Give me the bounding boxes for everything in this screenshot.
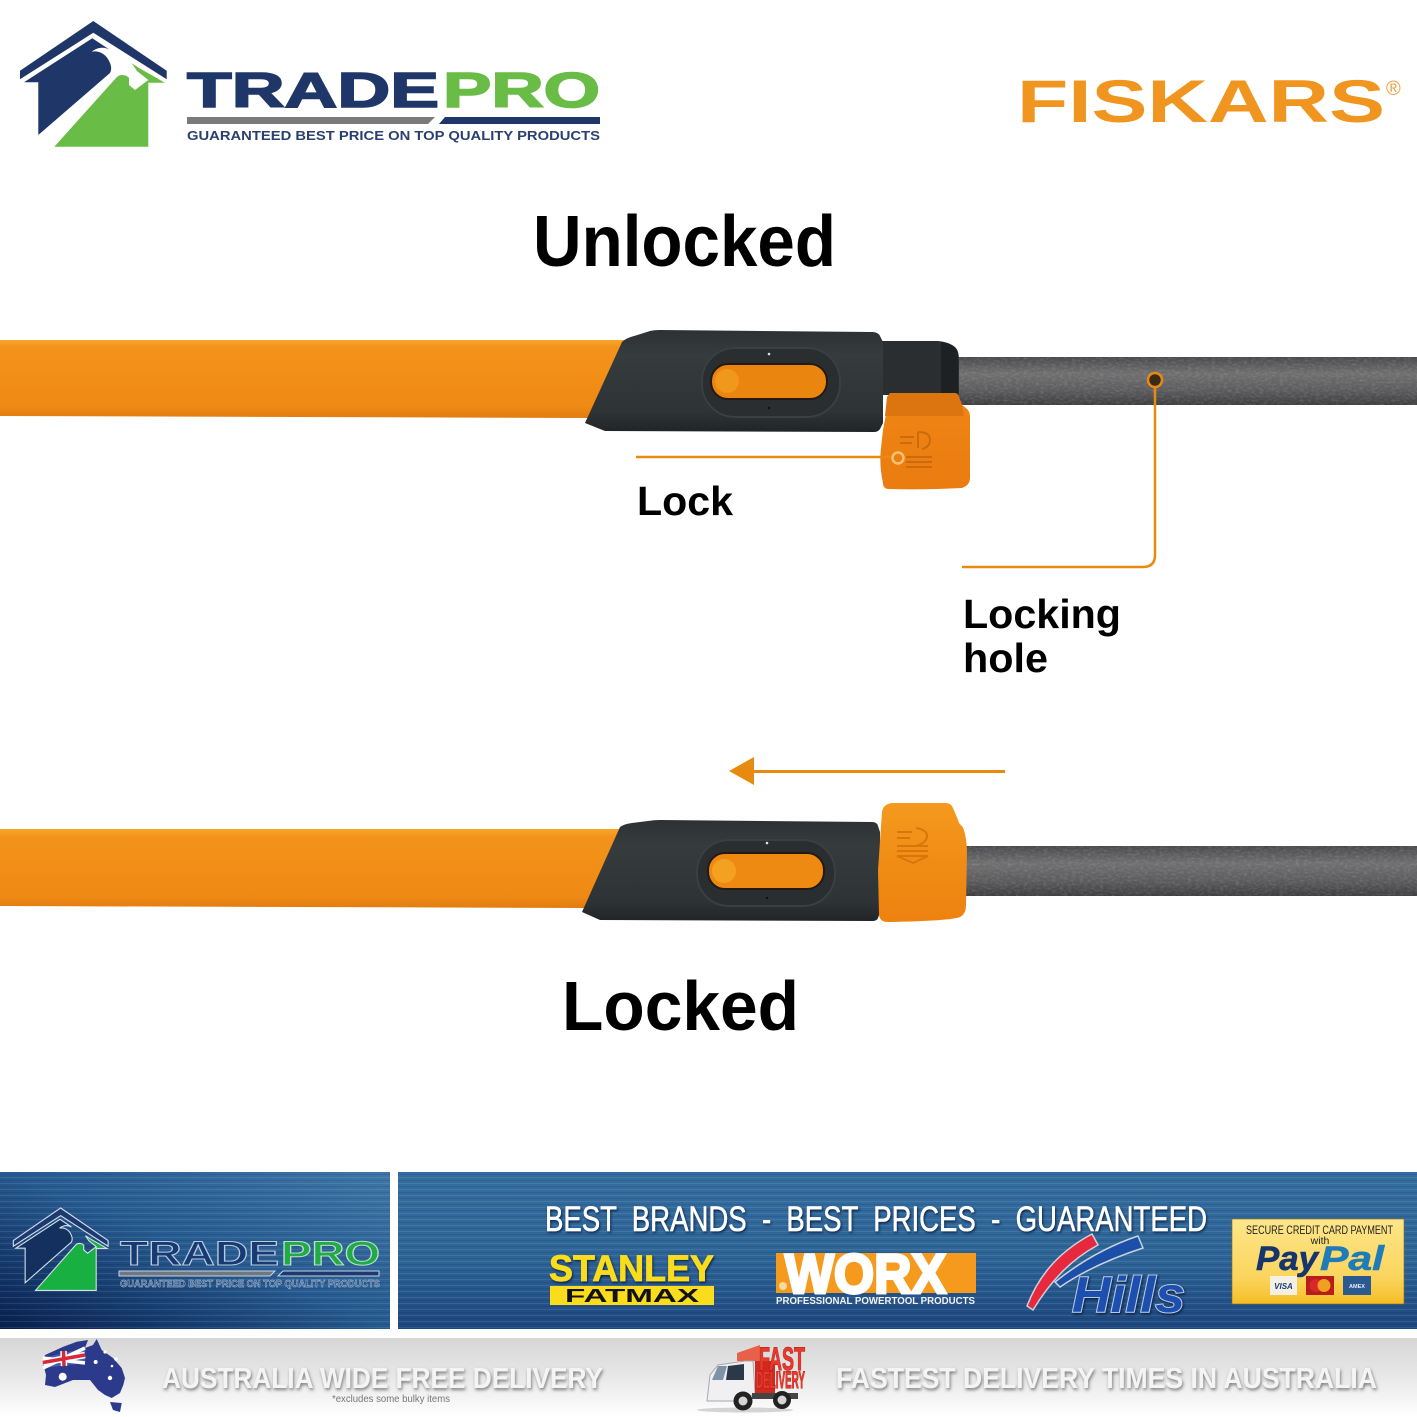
- PayPal secure payment badge: [1232, 1219, 1404, 1304]
- panel: TradePro blue banner: [0, 1172, 390, 1329]
- grey telescopic rod: [955, 357, 1417, 405]
- brand name TRADE: TRADE: [187, 64, 439, 118]
- orange slider button: [708, 853, 824, 889]
- button housing: [697, 840, 835, 906]
- PayPal secure payment badge: with: [1310, 1235, 1329, 1247]
- PayPal secure payment badge: Pay: [1256, 1240, 1320, 1278]
- locking hole: [1148, 373, 1162, 387]
- banner tagline: GUARANTEED BEST PRICE ON TOP QUALITY PRODUCTS: [120, 1278, 380, 1290]
- grey telescopic rod: [960, 846, 1417, 896]
- icon: house with hammer: [20, 21, 167, 147]
- logo: Worx: WORX: [785, 1242, 946, 1305]
- navy divider bar: [439, 117, 600, 124]
- banner brand TRADE: TRADE: [120, 1235, 279, 1273]
- icon: fast delivery truck: [697, 1341, 805, 1412]
- orange slider button: [711, 364, 827, 399]
- grey divider bar: [187, 117, 435, 124]
- dark grip: [582, 820, 880, 921]
- banner divider bars: [119, 1271, 379, 1276]
- label: Locking hole: Locking: [963, 591, 1121, 637]
- registered mark: ®: [1386, 78, 1401, 100]
- heading: Locked: Locked: [562, 967, 799, 1045]
- tagline: GUARANTEED BEST PRICE ON TOP QUALITY PRODUCTS: [187, 128, 600, 143]
- label: Lock: Lock: [637, 478, 733, 524]
- dark collar shade: [941, 342, 958, 393]
- PayPal secure payment badge: Pal: [1320, 1240, 1386, 1278]
- panel: brands blue banner: [398, 1172, 1417, 1329]
- logo: Hills: Hills: [1072, 1267, 1185, 1323]
- delivery text: fastest delivery times: FASTEST DELIVERY TIMES IN AUSTRALIA: [836, 1363, 1377, 1395]
- banner headline: BEST BRANDS - BEST PRICES - GUARANTEED: [545, 1200, 1207, 1239]
- orange lock clip: [880, 393, 970, 489]
- Fiskars logo: FISKARS: [1017, 68, 1385, 135]
- logo: Stanley FatMax: FATMAX: [565, 1285, 700, 1306]
- leader line: locking hole: [962, 387, 1155, 567]
- TradePro header logo: [20, 21, 600, 147]
- orange lock ring: [878, 803, 967, 922]
- label: Locking hole: [963, 591, 1121, 681]
- unlocked handle illustration: [0, 330, 1417, 567]
- dark collar rear: [880, 341, 959, 395]
- orange tube: [0, 340, 625, 418]
- button housing: [702, 348, 840, 417]
- label: Locking hole: hole: [963, 635, 1048, 681]
- logo: Worx: PROFESSIONAL POWERTOOL PRODUCTS: [776, 1295, 975, 1307]
- panel: delivery band: DELIVERY: [756, 1367, 805, 1394]
- locked handle illustration: [0, 803, 1417, 922]
- banner brand PRO: PRO: [281, 1235, 380, 1273]
- icon: fast delivery truck: FAST: [759, 1341, 805, 1377]
- panel: delivery band: [0, 1338, 1417, 1417]
- logo: Stanley FatMax: [549, 1248, 714, 1306]
- PayPal secure payment badge: VISA: [1274, 1282, 1293, 1291]
- logo: Hills: [1027, 1234, 1185, 1323]
- orange tube: [0, 829, 622, 908]
- leader line: lock: [636, 452, 904, 464]
- brand name PRO: PRO: [443, 64, 600, 118]
- delivery text: Australia wide free delivery: AUSTRALIA WIDE FREE DELIVERY: [162, 1363, 603, 1395]
- Fiskars logo: [1017, 68, 1401, 135]
- PayPal secure payment badge: AMEX: [1349, 1284, 1365, 1290]
- icon: Australia map with flag: [43, 1339, 125, 1412]
- logo: Stanley FatMax: STANLEY: [549, 1248, 714, 1289]
- footnote: *excludes some bulky items: [332, 1393, 450, 1405]
- heading: Unlocked: Unlocked: [533, 202, 836, 282]
- icon: banner house with hammer: [13, 1208, 108, 1290]
- arrow pointing left: [729, 757, 1005, 785]
- dark grip: [585, 330, 883, 432]
